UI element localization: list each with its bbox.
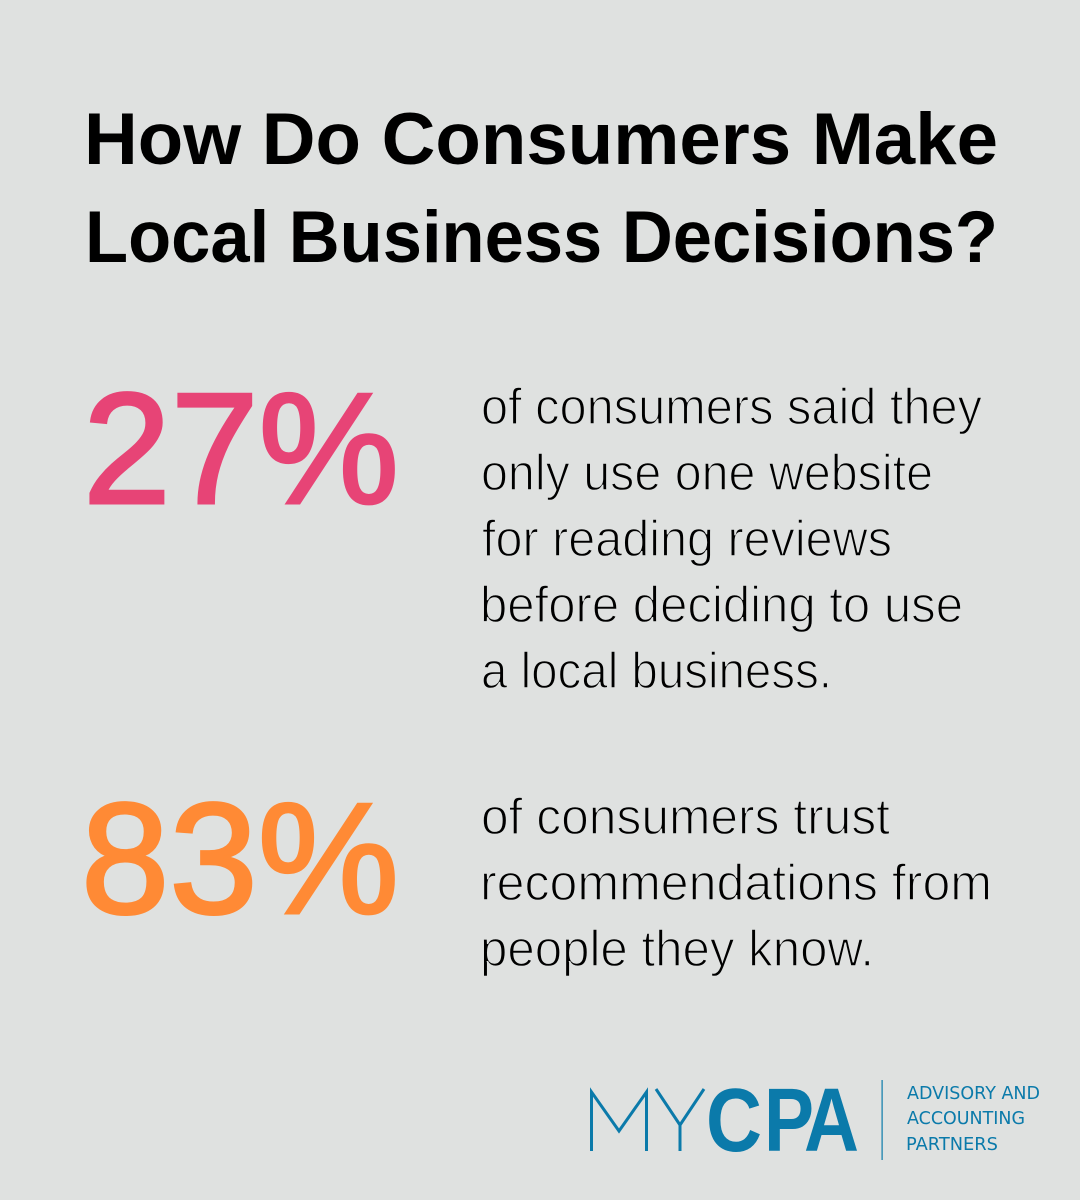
logo: MyCPA [592, 1071, 1040, 1171]
text block: 27% description: before deciding to use [480, 576, 963, 633]
title: How Do Consumers Make [84, 99, 998, 180]
logo wordmark: CPA: P [764, 1071, 814, 1171]
number: 83%: 83% [81, 771, 399, 947]
logo divider [882, 1080, 883, 1160]
logo tagline: PARTNERS [906, 1135, 998, 1155]
text block: 27% description: of consumers said they [481, 378, 982, 435]
logo tagline [906, 1084, 1040, 1155]
number: 27%: 27% [83, 361, 399, 537]
text block: 27% description: a local business. [481, 642, 832, 699]
text block: 83% description [480, 788, 992, 977]
logo tagline: ACCOUNTING [907, 1109, 1025, 1129]
logo wordmark: CPA: A [804, 1071, 859, 1171]
text block: 83% description: people they know. [480, 920, 874, 977]
text block: 27% description: for reading reviews [482, 510, 892, 567]
logo wordmark: CPA: C [706, 1071, 762, 1171]
title: Local Business Decisions? [85, 197, 998, 278]
text block: 83% description: recommendations from [480, 854, 992, 911]
text block: 83% description: of consumers trust [481, 788, 890, 845]
logo wordmark: CPA [706, 1071, 859, 1171]
title [84, 99, 998, 278]
text block: 27% description [480, 378, 982, 699]
logo mark: MY outline letters [592, 1089, 704, 1151]
panel: 83% statistic [81, 771, 992, 977]
text block: 27% description: only use one website [481, 444, 933, 501]
panel: 27% statistic [83, 361, 982, 699]
logo tagline: ADVISORY AND [907, 1084, 1040, 1104]
